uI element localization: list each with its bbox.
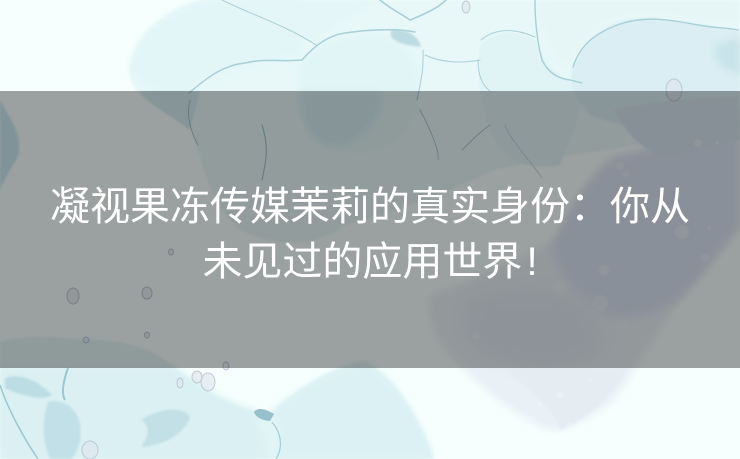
ink wash: top centre and right <box>0 0 740 243</box>
pale speckles in the stain <box>472 135 719 428</box>
title: 凝视果冻传媒茉莉的真实身份：你从未见过的应用世界! <box>50 185 690 284</box>
grey-blue stain on the right <box>429 96 740 432</box>
ink veins: fine blue lines <box>188 0 738 180</box>
dark translucent band <box>0 91 740 368</box>
ink wash: bottom left <box>0 337 434 459</box>
